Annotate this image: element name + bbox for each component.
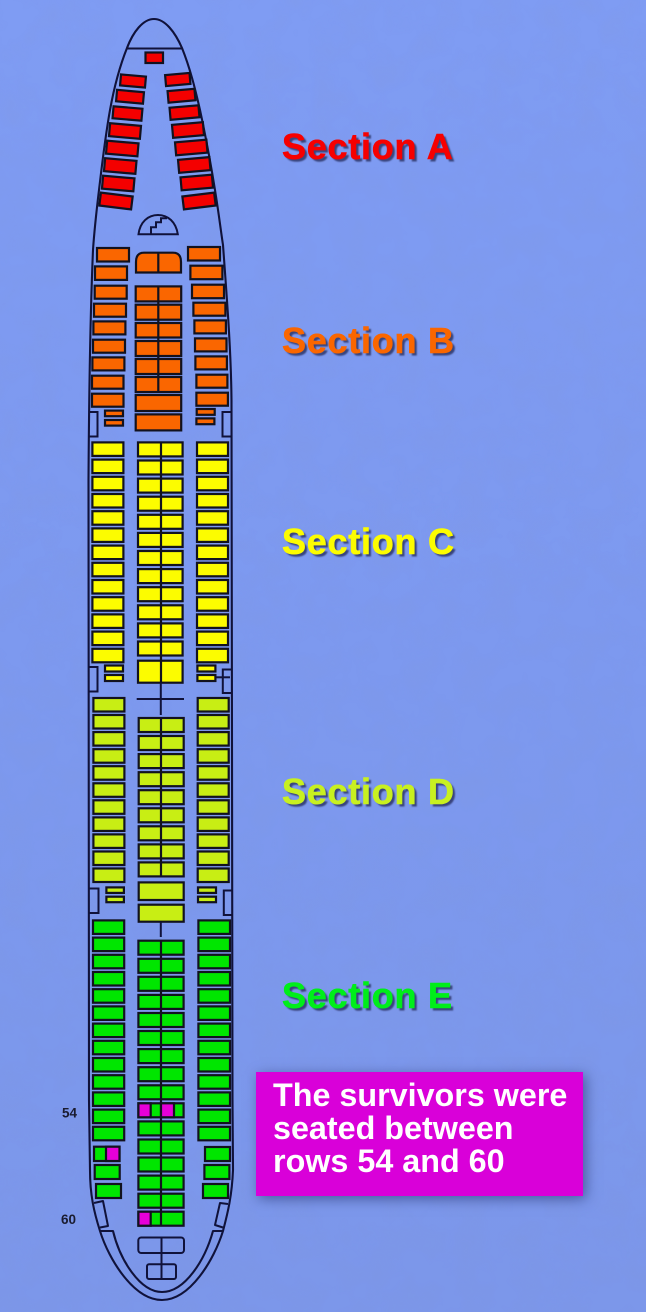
- icon: stairs: [138, 215, 178, 234]
- doors: mid-cabin pair 3: [89, 888, 232, 937]
- aircraft fuselage outline: [88, 19, 233, 1300]
- callout: survivors: rows 54 and 60: [273, 1143, 505, 1179]
- heading: Section D: Section D: [282, 770, 455, 812]
- row label 60: 60: [61, 1212, 76, 1227]
- doors and rear galley: [94, 1201, 228, 1279]
- seats: section D: [93, 698, 229, 922]
- heading: Section C: Section C: [282, 520, 455, 562]
- heading: Section B: Section B: [282, 320, 455, 360]
- survivor seats highlighted in magenta: [106, 1103, 174, 1226]
- callout: survivors: The survivors were: [273, 1077, 567, 1113]
- heading: Section A: Section A: [282, 126, 453, 166]
- seats: section E: [93, 920, 230, 1226]
- doors: mid-cabin pair 1: [89, 412, 231, 436]
- heading: Section E: Section E: [282, 974, 453, 1016]
- doors and cross aisle: mid-cabin pair 2: [89, 667, 231, 715]
- seats: section C: [92, 442, 228, 683]
- row label 54: 54: [62, 1106, 78, 1120]
- seats: section B: [92, 247, 228, 430]
- callout: survivors: seated between: [273, 1110, 514, 1146]
- callout: survivors: [256, 1072, 583, 1196]
- seats: section A: [99, 52, 216, 209]
